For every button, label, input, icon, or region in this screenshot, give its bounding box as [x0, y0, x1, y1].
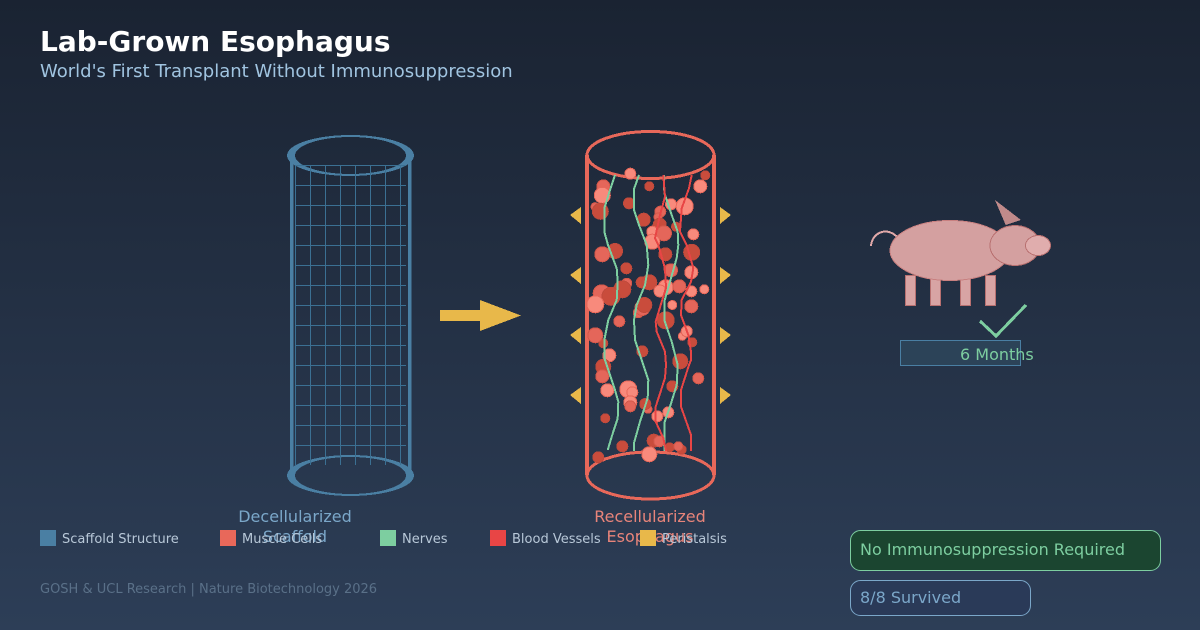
esophagus top rim	[587, 132, 714, 178]
esophagus walls	[585, 155, 716, 475]
pig legs	[906, 276, 996, 306]
callout: no immunosuppression	[850, 530, 1160, 570]
callout: survival: 8/8 Survived	[860, 588, 961, 607]
legend: peristalsis: Peristalsis	[662, 532, 727, 547]
six months badge	[900, 340, 1034, 366]
legend: peristalsis	[640, 530, 727, 547]
badge box	[900, 340, 1020, 366]
title: Lab-Grown Esophagus	[40, 25, 391, 58]
scaffold top rim	[287, 135, 414, 176]
callout: survival	[850, 580, 1030, 616]
legend: nerves: Nerves	[402, 532, 448, 547]
callout: no immunosuppression: No Immunosuppression Required	[860, 540, 1125, 559]
legend: muscle cells: Muscle Cells	[242, 532, 322, 547]
pig body	[890, 220, 1010, 280]
pig snout	[1026, 236, 1050, 256]
transformation arrow	[440, 300, 521, 331]
esophagus label: Recellularized	[594, 507, 706, 526]
recellularized esophagus cylinder	[570, 132, 731, 499]
legend: scaffold structure: Scaffold Structure	[62, 532, 179, 547]
esophagus label: Esophagus	[607, 527, 693, 546]
peristalsis arrows	[570, 207, 731, 404]
scaffold label: Scaffold	[263, 527, 327, 546]
scaffold walls	[290, 155, 412, 475]
esophagus bottom rim	[587, 452, 714, 499]
scaffold bottom rim	[287, 455, 414, 496]
pig head	[990, 226, 1040, 266]
pig tail	[871, 232, 898, 246]
blood vessels	[655, 175, 693, 451]
subtitle: World's First Transplant Without Immunosuppression	[40, 61, 513, 82]
nerves	[604, 175, 678, 451]
muscle cells	[587, 168, 710, 463]
legend: nerves	[380, 530, 448, 547]
badge text: 6 Months	[960, 345, 1034, 364]
legend: blood vessels: Blood Vessels	[512, 532, 601, 547]
scaffold grid mesh	[295, 165, 406, 465]
legend	[40, 530, 727, 547]
decellularized scaffold cylinder	[287, 135, 414, 496]
pig illustration	[871, 200, 1050, 306]
source footer: GOSH & UCL Research | Nature Biotechnology 2026	[40, 582, 377, 597]
legend: muscle cells	[220, 530, 322, 547]
pig ear	[995, 200, 1021, 225]
survival check mark	[980, 305, 1026, 336]
scaffold label: Decellularized	[238, 507, 352, 526]
